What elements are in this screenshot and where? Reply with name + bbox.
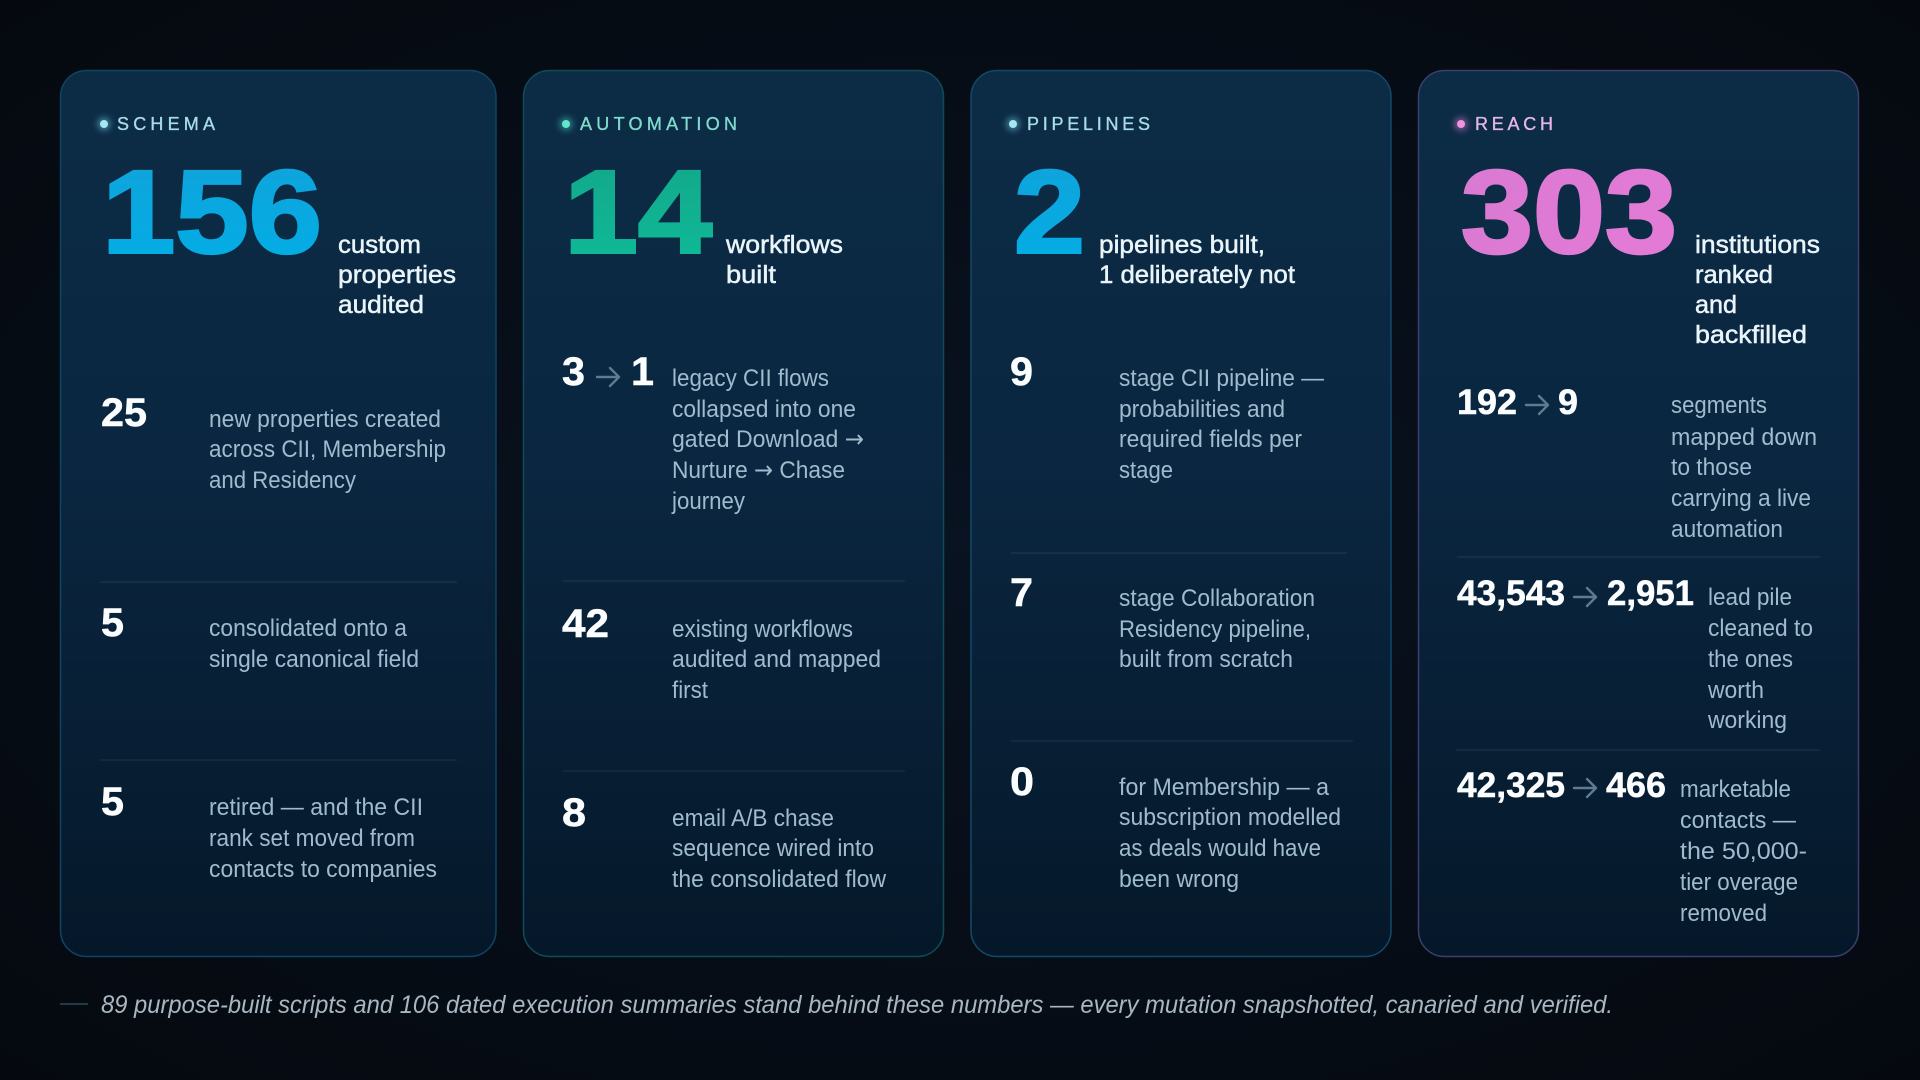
metric: 3 to 1: gated Download →: [672, 425, 864, 453]
metric: 43,543 to 2,951: [1457, 574, 1813, 734]
metric: 42,325 to 466: 42,325: [1457, 766, 1565, 805]
hero label: built: [726, 261, 776, 289]
metric: 9: 9: [1010, 350, 1033, 394]
metric: 7: Residency pipeline,: [1119, 616, 1311, 643]
metric: 42,325 to 466: 466: [1606, 766, 1666, 805]
hero number: 156: [102, 146, 322, 278]
metric: 25: 25: [101, 391, 147, 435]
metric: 42: first: [672, 677, 708, 704]
metric: 192 to 9: mapped down: [1671, 424, 1817, 451]
hero label: [338, 231, 456, 319]
metric: 43,543 to 2,951: worth: [1707, 677, 1764, 704]
metric: 192 to 9: automation: [1671, 516, 1783, 543]
status dot: [560, 118, 572, 130]
metric: 42: [562, 602, 881, 704]
panel: schema: [60, 70, 496, 956]
metric: 192 to 9: segments: [1671, 392, 1767, 419]
metric: 25: [101, 391, 446, 494]
metric: 25: new properties created: [209, 406, 441, 433]
card background: [524, 70, 944, 956]
hero label: 1 deliberately not: [1099, 261, 1295, 289]
card background: [971, 70, 1391, 956]
metric: 42,325 to 466: contacts —: [1680, 807, 1796, 834]
metric: 0: 0: [1010, 760, 1034, 804]
tag: schema: SCHEMA: [117, 114, 215, 134]
metric: 8: email A/B chase: [672, 805, 834, 832]
metric: 3 to 1: 3: [562, 350, 585, 394]
metric: 192 to 9: to those: [1671, 454, 1752, 481]
metric: 5 retired: 5: [101, 780, 124, 824]
metric: 5 retired: [101, 780, 437, 883]
metric: 8: sequence wired into: [672, 835, 874, 862]
metric: 42,325 to 466: marketable: [1680, 776, 1791, 803]
metric: 9: stage CII pipeline —: [1119, 365, 1324, 392]
metric: 9: probabilities and: [1119, 396, 1285, 423]
panel: pipelines: [971, 70, 1391, 956]
metric: 5 consolidated: [101, 601, 419, 673]
metric: 25: across CII, Membership: [209, 436, 446, 463]
metric: 192 to 9: 9: [1558, 383, 1578, 422]
metric: 3 to 1: Nurture → Chase: [672, 456, 845, 484]
metric: 192 to 9: [1457, 383, 1817, 543]
hero label: [725, 231, 843, 289]
hero label: and: [1695, 291, 1737, 319]
metric: 0: been wrong: [1119, 866, 1239, 893]
tag: automation: AUTOMATION: [580, 114, 737, 134]
metric: 5 retired: rank set moved from: [209, 825, 415, 852]
arrow: [1574, 588, 1596, 606]
metric: 42,325 to 466: removed: [1680, 900, 1767, 927]
metric: 0: [1010, 760, 1341, 893]
metric: 5 consolidated: 5: [101, 601, 124, 645]
status dot: [1454, 118, 1468, 130]
metric: 5 retired: contacts to companies: [209, 856, 437, 883]
metric: 43,543 to 2,951: 2,951: [1607, 574, 1694, 613]
card background: [1418, 70, 1858, 956]
hero label: backfilled: [1695, 321, 1807, 349]
status dot: [98, 118, 110, 130]
hero label: [1695, 231, 1820, 349]
metric: 42: existing workflows: [672, 616, 853, 643]
hero label: institutions: [1695, 231, 1820, 259]
metric: 5 consolidated: consolidated onto a: [209, 615, 408, 642]
metric: 42: 42: [562, 602, 609, 646]
tag: pipelines: PIPELINES: [1027, 114, 1150, 134]
metric: 5 consolidated: single canonical field: [209, 646, 419, 673]
metric: 3 to 1: collapsed into one: [672, 396, 856, 423]
metric: 0: subscription modelled: [1119, 804, 1341, 831]
metric: 7: stage Collaboration: [1119, 585, 1315, 612]
hero label: workflows: [725, 231, 843, 259]
hero label: pipelines built,: [1099, 231, 1265, 259]
tag: reach: REACH: [1475, 114, 1553, 134]
metric: 3 to 1: journey: [671, 488, 745, 515]
metric: 9: [1010, 350, 1324, 484]
panel: automation: [524, 70, 944, 956]
metric: 8: the consolidated flow: [672, 866, 887, 893]
panel: reach: [1418, 70, 1858, 956]
hero number: 2: [1014, 146, 1085, 278]
metric: 7: 7: [1010, 571, 1033, 615]
metric: 43,543 to 2,951: cleaned to: [1708, 615, 1813, 642]
metric: 8: [562, 791, 887, 893]
metric: 9: required fields per: [1119, 426, 1302, 453]
metric: 7: [1010, 571, 1315, 673]
metric: 7: built from scratch: [1119, 646, 1293, 673]
metric: 43,543 to 2,951: lead pile: [1708, 584, 1792, 611]
arrow: [1574, 779, 1596, 797]
hero label: ranked: [1695, 261, 1773, 289]
metric: 0: as deals would have: [1119, 835, 1321, 862]
metric: 3 to 1: legacy CII flows: [672, 365, 829, 392]
metric: 0: for Membership — a: [1119, 774, 1330, 801]
status dot: [1006, 118, 1020, 130]
metric: 43,543 to 2,951: the ones: [1708, 646, 1793, 673]
hero number: 303: [1461, 146, 1677, 278]
metric: 8: 8: [562, 791, 586, 835]
metric: 192 to 9: carrying a live: [1671, 485, 1811, 512]
metric: 43,543 to 2,951: 43,543: [1457, 574, 1565, 613]
hero number: 14: [564, 146, 712, 278]
metric: 5 retired: retired — and the CII: [209, 794, 423, 821]
metric: 43,543 to 2,951: working: [1707, 707, 1787, 734]
card background: [60, 70, 496, 956]
metric: 25: and Residency: [209, 467, 356, 494]
metric: 3 to 1: 1: [631, 350, 654, 394]
hero label: [1099, 231, 1295, 289]
hero label: custom: [338, 231, 421, 259]
arrow: [1526, 396, 1548, 414]
arrow: [597, 368, 619, 386]
metric: 192 to 9: 192: [1457, 383, 1517, 422]
metric: 42,325 to 466: the 50,000-: [1680, 838, 1807, 865]
metric: 42,325 to 466: [1457, 766, 1807, 927]
metric: 42: audited and mapped: [672, 646, 881, 673]
hero label: audited: [338, 291, 424, 319]
metric: 42,325 to 466: tier overage: [1680, 869, 1798, 896]
footer note: 89 purpose-built scripts and 106 dated execution summaries stand behind these numbers — every mutation snapshotted, canaried and verified.: [101, 991, 1613, 1019]
metric: 3 to 1: [562, 350, 864, 515]
hero label: properties: [338, 261, 456, 289]
metric: 9: stage: [1119, 457, 1173, 484]
